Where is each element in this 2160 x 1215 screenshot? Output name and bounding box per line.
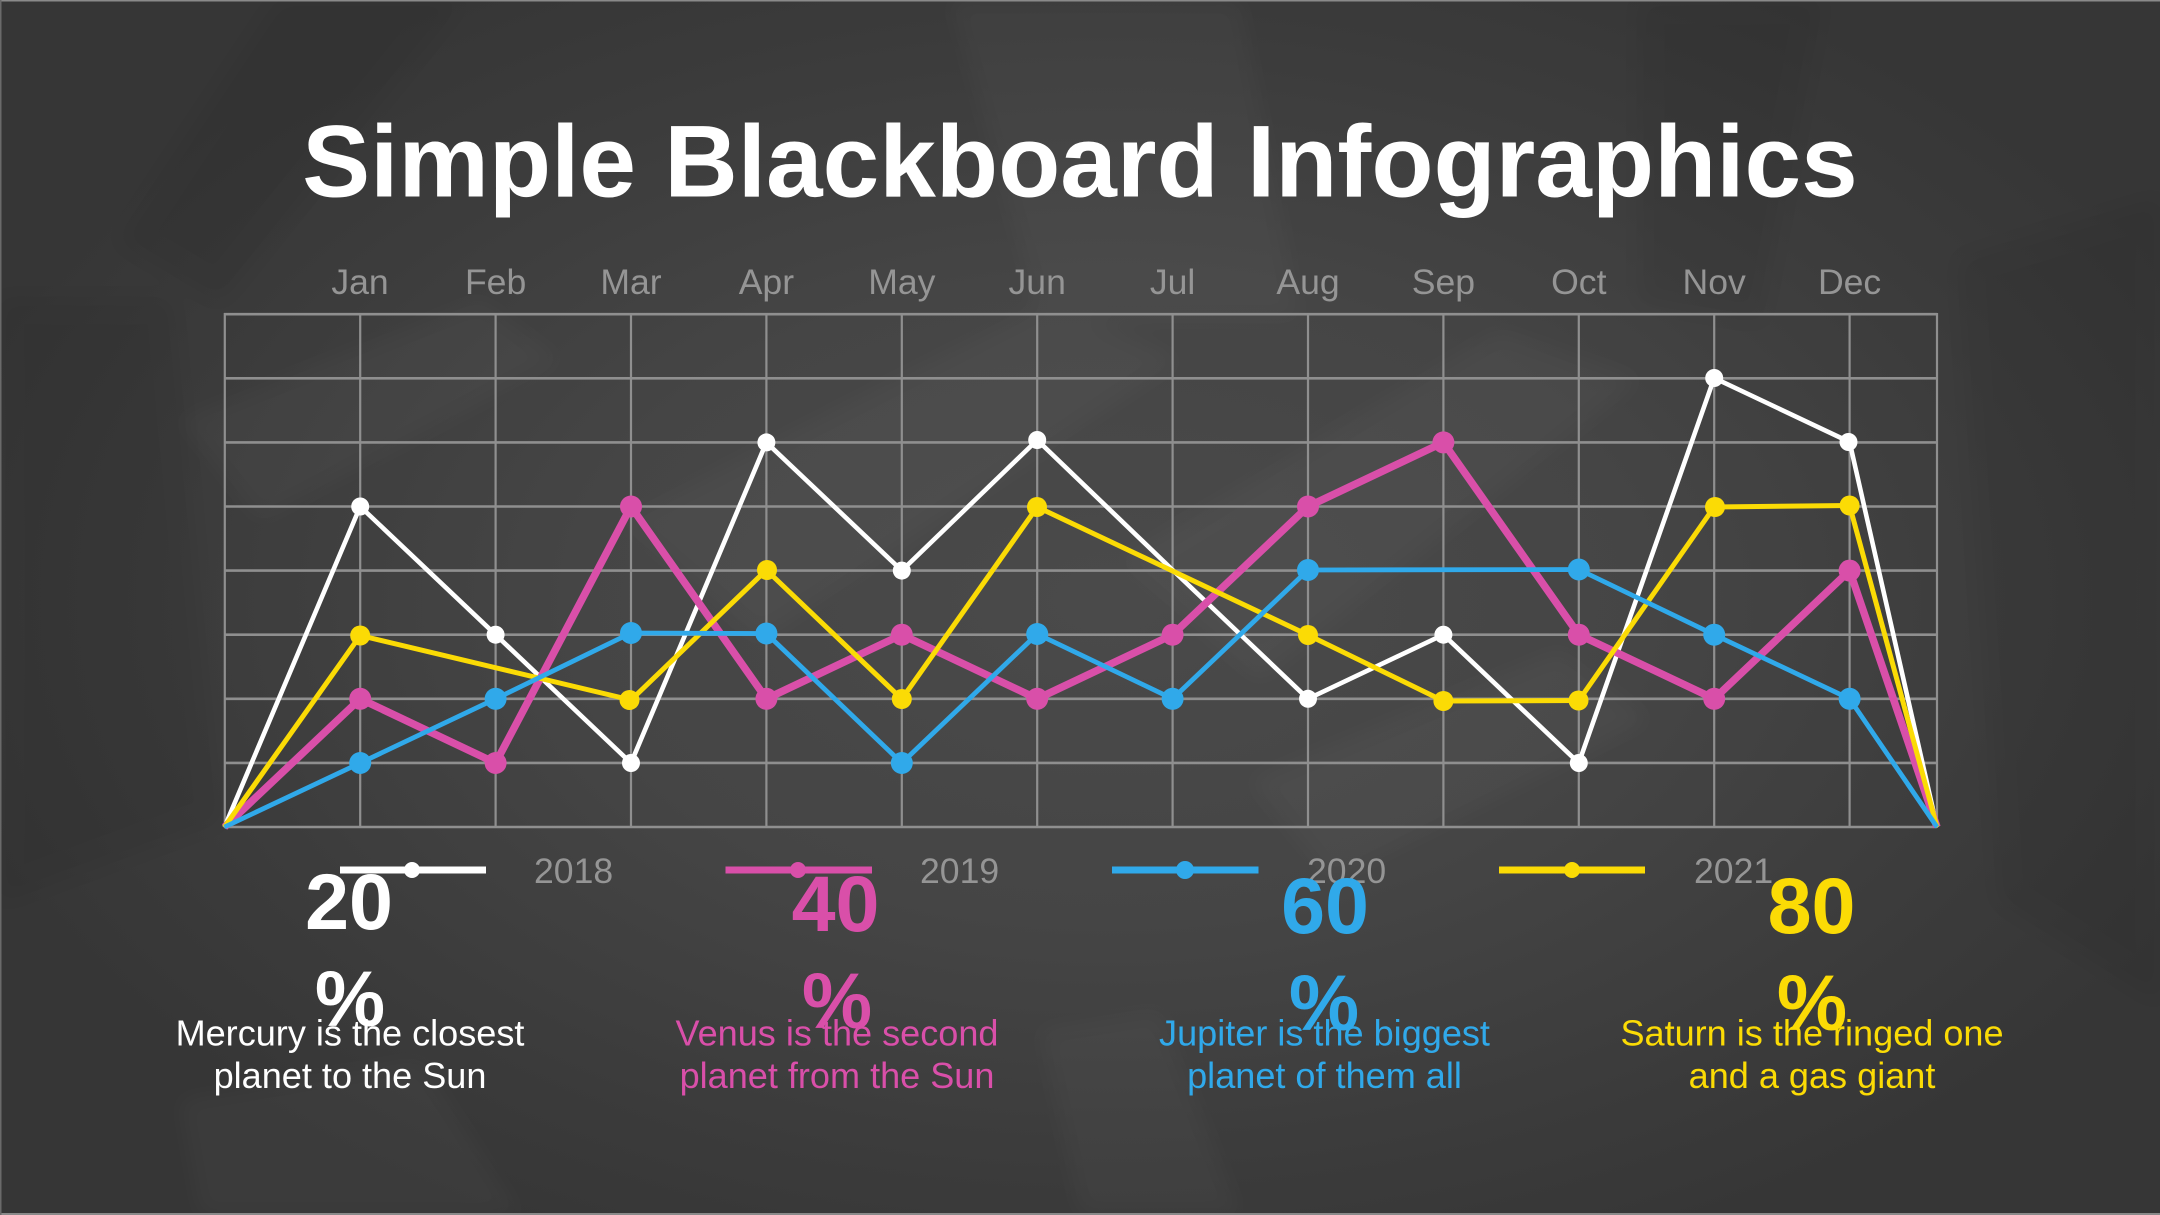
- series 2019: magenta: [224, 431, 1937, 827]
- month labels: [331, 262, 1881, 302]
- month labels: Dec: [1818, 262, 1881, 302]
- legend item 2021: [1499, 851, 1773, 891]
- title: Simple Blackboard Infographics: [302, 104, 1858, 218]
- legend item 2019: 2019: [920, 851, 999, 891]
- legend: [340, 851, 1773, 891]
- stat: Saturn 80%: and a gas giant: [1689, 1055, 1935, 1096]
- month labels: Aug: [1276, 262, 1340, 302]
- stat: Jupiter 60%: [1159, 861, 1490, 1096]
- chart grid: [224, 313, 1937, 828]
- stat: Venus 40%: 40: [792, 859, 879, 948]
- legend item 2020: 2020: [1307, 851, 1386, 891]
- stat: Saturn 80%: Saturn is the ringed one: [1620, 1012, 2004, 1054]
- stat: Saturn 80%: %: [1777, 958, 1847, 1047]
- stat: Mercury 20%: 20: [305, 857, 393, 946]
- legend item 2018: 2018: [534, 851, 613, 891]
- stat: Jupiter 60%: %: [1289, 958, 1359, 1047]
- month labels: Apr: [739, 262, 794, 302]
- stat: Venus 40%: planet from the Sun: [680, 1055, 994, 1096]
- month labels: Sep: [1412, 262, 1475, 302]
- legend item 2020: [1112, 851, 1386, 891]
- stat: Jupiter 60%: 60: [1281, 861, 1369, 950]
- stat: Saturn 80%: [1620, 861, 2004, 1096]
- stat: Mercury 20%: %: [315, 954, 385, 1043]
- stat: Jupiter 60%: planet of them all: [1187, 1055, 1462, 1096]
- line chart: [224, 262, 1937, 828]
- month labels: Oct: [1551, 262, 1607, 302]
- slide edge: [0, 0, 2160, 2]
- stat: Saturn 80%: 80: [1768, 861, 1855, 950]
- month labels: Mar: [600, 262, 662, 302]
- stat: Venus 40%: [676, 859, 998, 1096]
- month labels: May: [868, 262, 936, 302]
- stat: Mercury 20%: Mercury is the closest: [176, 1012, 524, 1054]
- stat: Mercury 20%: [176, 857, 524, 1096]
- month labels: Nov: [1683, 262, 1746, 302]
- legend item 2019: [726, 851, 999, 891]
- stat: Venus 40%: Venus is the second: [676, 1012, 998, 1054]
- series 2020: blue: [224, 558, 1937, 827]
- month labels: Jan: [331, 262, 389, 302]
- series 2021: yellow: [224, 496, 1937, 827]
- stat: Venus 40%: %: [802, 956, 872, 1045]
- series 2018: white: [224, 369, 1937, 827]
- stat: Mercury 20%: planet to the Sun: [214, 1055, 486, 1096]
- month labels: Feb: [465, 262, 526, 302]
- month labels: Jun: [1009, 262, 1066, 302]
- legend item 2018: [340, 851, 613, 891]
- month labels: Jul: [1150, 262, 1195, 302]
- stat: Jupiter 60%: Jupiter is the biggest: [1159, 1012, 1490, 1054]
- legend item 2021: 2021: [1694, 851, 1773, 891]
